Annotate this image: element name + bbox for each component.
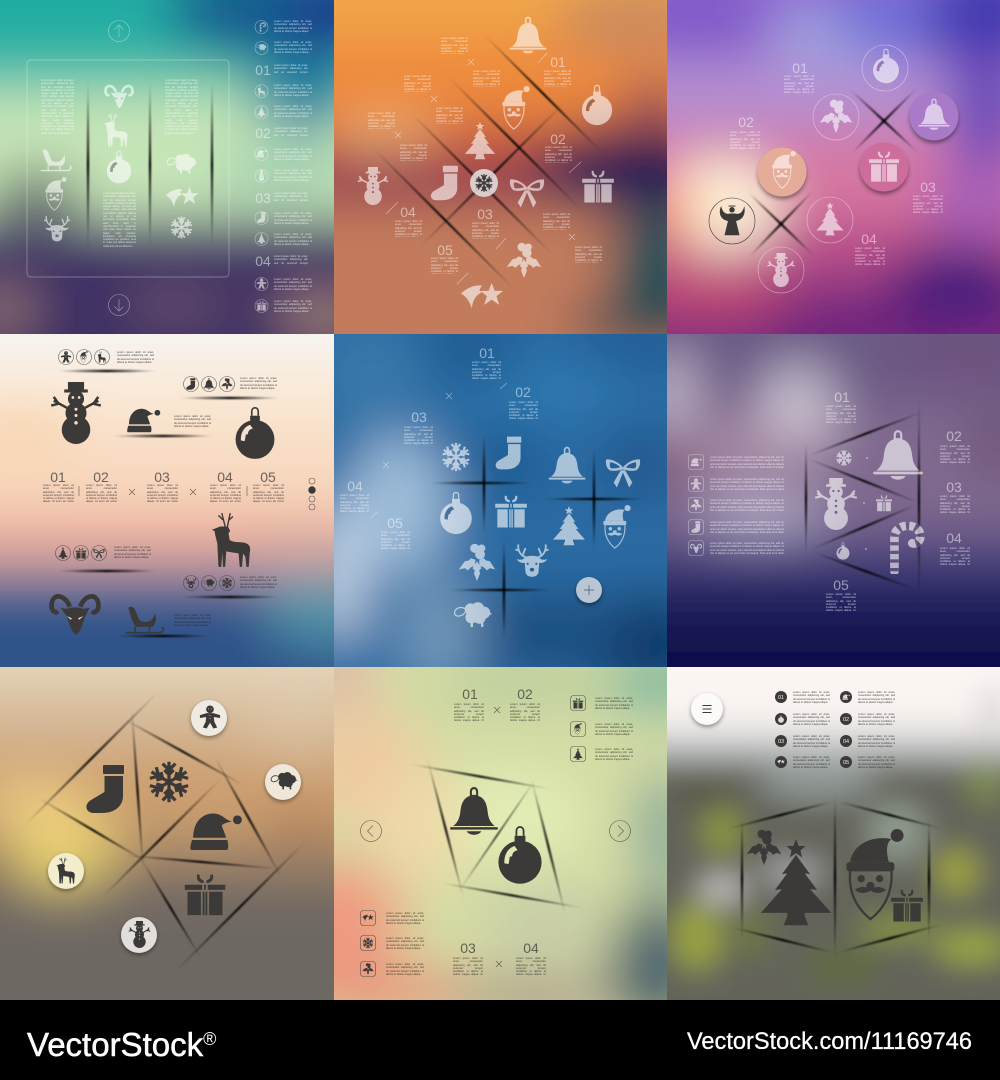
numbers: 02 bbox=[946, 428, 962, 444]
numbered list right: 02 bbox=[843, 717, 849, 723]
raised circle: bell bbox=[910, 92, 958, 143]
background blur bbox=[0, 547, 460, 1080]
numbers: 02 bbox=[255, 125, 271, 141]
icon: stocking bbox=[496, 437, 521, 469]
icon: tree with star bbox=[761, 839, 831, 925]
tick and cross marks bbox=[386, 53, 581, 284]
numbers: 05 bbox=[387, 515, 403, 531]
numbers bbox=[833, 389, 962, 593]
text: Lorem ipsum dolor sit amet, consectetur adipiscing elit, sed do eiusmod tempor incididunt ut labore et dolore magna aliqua. bbox=[793, 713, 830, 726]
dots bbox=[863, 457, 868, 550]
frame bbox=[27, 60, 229, 277]
triangle folds bbox=[409, 757, 585, 917]
text: Lorem ipsum dolor sit amet, consectetur adipiscing elit, sed do eiusmod tempor incididunt ut labore et dolore magna aliqua. bbox=[595, 697, 633, 710]
image id: VectorStock.com/11169746 bbox=[687, 1029, 972, 1055]
panel: dusk triangles bbox=[667, 334, 1000, 667]
icon: sheep bbox=[167, 154, 197, 174]
badge: deer bbox=[48, 853, 84, 891]
text: Lorem ipsum dolor sit amet, consectetur adipiscing elit, sed do eiusmod tempor incididunt ut labore et dolore magna aliqua. bbox=[274, 169, 312, 182]
numbers: 01 bbox=[834, 389, 850, 405]
text: Lorem ipsum dolor sit amet, consectetur adipiscing elit, sed do eiusmod tempor incididunt ut labore et dolore magna aliqua. bbox=[274, 300, 312, 313]
numbers: 03 bbox=[477, 206, 493, 222]
left icon tiles bbox=[360, 910, 376, 976]
text: Lorem ipsum dolor sit amet, consectetur adipiscing elit, sed do eiusmod tempor incididunt ut labore et dolore magna aliqua. bbox=[386, 912, 424, 925]
icon row 3 bbox=[56, 546, 106, 560]
numbers: 05 bbox=[260, 469, 276, 485]
text: Lorem ipsum dolor sit amet, consectetur adipiscing elit, sed do eiusmod tempor incididunt ut labore et dolore magna aliqua. bbox=[595, 723, 633, 736]
text: Lorem ipsum dolor sit amet, consectetur adipiscing elit, sed do eiusmod tempor incididunt ut labore et dolore magna aliqua. bbox=[793, 735, 830, 748]
footer brand bar bbox=[0, 1000, 1000, 1080]
icon: ram bbox=[52, 596, 98, 635]
panel: tan polygon bbox=[0, 667, 334, 1000]
text: Lorem ipsum dolor sit amet, consectetur adipiscing elit, sed do eiusmod tempor incididunt ut labore et dolore magna aliqua. bbox=[858, 756, 895, 769]
icon: sheep bbox=[455, 602, 492, 627]
text: Lorem ipsum dolor sit amet, consectetur adipiscing elit, sed do eiusmod tempor incididunt ut labore et dolore magna aliqua. bbox=[240, 576, 277, 589]
circle: snowman bbox=[758, 247, 804, 293]
background blur bbox=[214, 547, 794, 1080]
text: Lorem ipsum dolor sit amet, consectetur adipiscing elit, sed do eiusmod tempor incididunt ut labore et dolore magna aliqua. bbox=[274, 233, 312, 246]
icon: hat bbox=[127, 409, 160, 432]
numbers: 01 bbox=[479, 345, 495, 361]
numbers: 05 bbox=[833, 577, 849, 593]
icon: gift bbox=[185, 874, 225, 915]
background blur bbox=[547, 0, 1000, 460]
numbered list left: 01 bbox=[778, 695, 784, 701]
icon row 1 bbox=[58, 350, 110, 364]
text: Lorem ipsum dolor sit amet, consectetur adipiscing elit, sed do eiusmod tempor incididunt ut labore et dolore magna aliqua. bbox=[793, 691, 830, 704]
icon: ornament bbox=[498, 827, 542, 884]
icon: deer bbox=[104, 114, 127, 146]
icon: bell bbox=[873, 430, 923, 480]
numbers: 03 bbox=[154, 469, 170, 485]
text: Lorem ipsum dolor sit amet, consectetur adipiscing elit, sed do eiusmod tempor incididunt ut labore et dolore magna aliqua. bbox=[117, 351, 154, 364]
icon: comet bbox=[166, 187, 198, 207]
text: Lorem ipsum dolor sit amet, consectetur adipiscing elit, sed do eiusmod tempor incididunt ut labore et dolore magna aliqua. bbox=[274, 84, 312, 97]
panel: blue grid bbox=[334, 334, 667, 667]
text: Lorem ipsum dolor sit amet, consectetur adipiscing elit, sed do eiusmod tempor incididunt ut labore et dolore magna aliqua. bbox=[386, 937, 424, 950]
raised circle: santa bbox=[758, 148, 806, 199]
panel: forest blur with cube bbox=[667, 667, 1000, 1000]
icon: sleigh bbox=[41, 149, 71, 171]
diagonal folds bbox=[370, 32, 608, 293]
icon: snowman bbox=[815, 478, 857, 530]
icon: bell bbox=[450, 787, 498, 835]
numbers: 01 bbox=[550, 54, 566, 70]
text: Lorem ipsum dolor sit amet, consectetur adipiscing elit, sed do eiusmod tempor incididunt ut labore et dolore magna aliqua. bbox=[274, 20, 312, 33]
icon row 2 bbox=[184, 376, 234, 392]
background blur bbox=[0, 0, 460, 460]
numbers: 04 bbox=[255, 253, 271, 269]
numbers: 03 bbox=[920, 179, 936, 195]
icon: bow bbox=[606, 459, 640, 488]
plus button bbox=[576, 577, 602, 605]
icon: sleigh bbox=[126, 607, 163, 633]
icon: comet bbox=[461, 283, 503, 308]
icon: gift bbox=[891, 890, 923, 922]
text: Lorem ipsum dolor sit amet, consectetur adipiscing elit, sed do eiusmod tempor incididunt ut labore et dolore magna aliqua. bbox=[274, 41, 312, 54]
icon: snowman bbox=[51, 382, 101, 444]
text: Lorem ipsum dolor sit amet, consectetur adipiscing elit, sed do eiusmod tempor incididunt ut labore et dolore magna aliqua. bbox=[174, 614, 211, 627]
right icon tiles bbox=[570, 696, 586, 762]
icon: deer bbox=[212, 513, 250, 567]
text column 3: Lorem ipsum dolor sit amet, consectetur adipiscing elit, sed do eiusmod tempor incididunt ut labore et dolore magna aliqua. Ut enim ad minim veniam, quis nostrud exercitation ullamco laboris nisi ut aliquip ex ea commodo consequat. Duis aute irure dolor in reprehenderit in voluptate velit esse cillum dolore eu fugiat nulla pariatur. Excepteur sint occaecat cupidatat non proident, sunt in culpa qui officia deserunt mollit anim id est laborum. bbox=[165, 79, 198, 135]
numbers: 04 bbox=[946, 530, 962, 546]
icon: ram bbox=[105, 86, 133, 108]
background blur bbox=[214, 214, 794, 794]
icon: ornament bbox=[107, 151, 131, 183]
icon: tree bbox=[553, 506, 585, 545]
badge: sheep bbox=[265, 764, 301, 802]
numbers: 01 bbox=[255, 62, 271, 78]
arrow down button bbox=[108, 294, 130, 316]
numbers: 02 bbox=[517, 686, 533, 702]
icon: snowflake bbox=[148, 762, 190, 802]
icon: santa bbox=[45, 177, 67, 210]
text: Lorem ipsum dolor sit amet, consectetur adipiscing elit, sed do eiusmod tempor incididunt ut labore et dolore magna aliqua. bbox=[386, 963, 424, 976]
text column 2: Lorem ipsum dolor sit amet, consectetur adipiscing elit, sed do eiusmod tempor incididunt ut labore et dolore magna aliqua. Ut enim ad minim veniam, quis nostrud exercitation ullamco laboris nisi ut aliquip ex ea commodo consequat. Duis aute irure dolor in reprehenderit in voluptate velit esse cillum dolore eu fugiat nulla pariatur. Excepteur sint occaecat cupidatat non proident, sunt in culpa qui officia deserunt mollit anim id est laborum. bbox=[103, 192, 136, 248]
numbers: 04 bbox=[861, 231, 877, 247]
circle: tree bbox=[807, 197, 853, 243]
numbers: 04 bbox=[523, 940, 539, 956]
icon: gift bbox=[582, 171, 614, 203]
numbered list left: 03 bbox=[778, 739, 784, 745]
icon row 4 bbox=[184, 576, 234, 590]
icon: hat bbox=[190, 814, 242, 850]
numbers bbox=[400, 54, 566, 258]
arrow up button bbox=[108, 20, 130, 42]
numbers: 02 bbox=[738, 114, 754, 130]
text: Lorem ipsum dolor sit amet, consectetur adipiscing elit, sed do eiusmod tempor incididunt ut labore et dolore magna aliqua. bbox=[858, 735, 895, 748]
text column 1: Lorem ipsum dolor sit amet, consectetur adipiscing elit, sed do eiusmod tempor incididunt ut labore et dolore magna aliqua. Ut enim ad minim veniam, quis nostrud exercitation ullamco laboris nisi ut aliquip ex ea commodo consequat. Duis aute irure dolor in reprehenderit in voluptate velit esse cillum dolore eu fugiat nulla pariatur. Excepteur sint occaecat cupidatat non proident, sunt in culpa qui officia deserunt mollit anim id est laborum. bbox=[41, 79, 74, 135]
numbers: 04 bbox=[400, 204, 416, 220]
icon: stocking bbox=[431, 166, 458, 200]
numbers: 01 bbox=[792, 60, 808, 76]
icon: snowflake bbox=[442, 443, 470, 471]
icon: bell bbox=[549, 447, 585, 484]
text: Lorem ipsum dolor sit amet, consectetur adipiscing elit, sed do eiusmod tempor incididunt ut labore et dolore magna aliqua. bbox=[240, 377, 277, 390]
numbers bbox=[50, 469, 276, 485]
sidebar icon list bbox=[255, 20, 268, 312]
icon: santa bbox=[846, 829, 904, 919]
column folds bbox=[87, 80, 213, 250]
icon: ornament bbox=[236, 408, 274, 459]
background blur bbox=[214, 0, 794, 460]
icon: holly bbox=[747, 830, 781, 865]
polygon folds bbox=[22, 689, 308, 975]
text: Lorem ipsum dolor sit amet, consectetur adipiscing elit, sed do eiusmod tempor incididunt ut labore et dolore magna aliqua. bbox=[274, 148, 312, 161]
circle: ornament bbox=[862, 45, 908, 91]
circle: holly bbox=[813, 94, 859, 140]
icon: snowflake bbox=[170, 216, 193, 238]
text: Lorem ipsum dolor sit amet, consectetur adipiscing elit, sed do eiusmod tempor incididunt ut labore et dolore magna aliqua. bbox=[858, 713, 895, 726]
numbers bbox=[738, 60, 936, 247]
numbers bbox=[255, 62, 271, 269]
icon: bow bbox=[510, 179, 544, 208]
icon: holly bbox=[459, 544, 495, 581]
icon: candy cane bbox=[894, 526, 920, 571]
icon: snowflake bbox=[836, 450, 852, 466]
numbers: 04 bbox=[217, 469, 233, 485]
text: Lorem ipsum dolor sit amet, consectetur adipiscing elit, sed do eiusmod tempor incididunt ut labore et dolore magna aliqua. bbox=[274, 278, 312, 291]
arrow right bbox=[610, 820, 630, 842]
icon: ornament bbox=[837, 543, 849, 560]
center folds bbox=[746, 87, 919, 259]
panel: peach timeline bbox=[0, 334, 334, 667]
icon: reindeer bbox=[515, 544, 549, 577]
panel: pastel triangles bbox=[334, 667, 667, 1000]
text: Lorem ipsum dolor sit amet, consectetur adipiscing elit, sed do eiusmod tempor incididunt ut labore et dolore magna aliqua. bbox=[595, 748, 633, 761]
numbers: 02 bbox=[93, 469, 109, 485]
numbers: 01 bbox=[462, 686, 478, 702]
separators bbox=[79, 486, 247, 496]
numbered list right bbox=[840, 691, 852, 768]
numbers: 01 bbox=[50, 469, 66, 485]
numbers: 03 bbox=[411, 409, 427, 425]
icon: tree bbox=[465, 122, 495, 159]
numbers bbox=[347, 345, 531, 531]
icon: snowman bbox=[358, 167, 388, 205]
badge: snowman bbox=[121, 917, 157, 955]
text: Lorem ipsum dolor sit amet, consectetur adipiscing elit, sed do eiusmod tempor incididunt ut labore et dolore magna aliqua. bbox=[793, 756, 830, 769]
text: Lorem ipsum dolor sit amet, consectetur adipiscing elit, sed do eiusmod tempor incididunt ut labore et dolore magna aliqua. bbox=[174, 415, 211, 428]
numbered list right: 04 bbox=[843, 739, 849, 745]
raised circle: gift bbox=[860, 142, 908, 194]
numbered list right: 05 bbox=[843, 760, 849, 766]
text: Lorem ipsum dolor sit amet, consectetur adipiscing elit, sed do eiusmod tempor incididunt ut labore et dolore magna aliqua. bbox=[858, 691, 895, 704]
text: Lorem ipsum dolor sit amet, consectetur adipiscing elit, sed do eiusmod tempor incididunt ut labore et dolore magna aliqua. bbox=[114, 546, 151, 559]
numbers: 03 bbox=[460, 940, 476, 956]
panel: orange diagonal folds bbox=[334, 0, 667, 334]
cube folds bbox=[726, 792, 944, 962]
brand name: VectorStock® bbox=[27, 1026, 216, 1063]
icon: ornament bbox=[440, 492, 472, 534]
icon: holly bbox=[507, 243, 541, 278]
background blur bbox=[0, 214, 460, 794]
circle: angel bbox=[709, 198, 755, 244]
menu button bbox=[691, 693, 723, 727]
ticks and crosses bbox=[371, 383, 507, 518]
badge: gingerbread bbox=[191, 700, 227, 738]
crosses bbox=[494, 707, 502, 967]
left icon tiles bbox=[688, 454, 704, 556]
numbers: 03 bbox=[255, 190, 271, 206]
numbers: 02 bbox=[515, 384, 531, 400]
shadow folds bbox=[57, 370, 280, 637]
arrow left bbox=[360, 820, 382, 842]
icon: gift bbox=[495, 496, 527, 528]
numbers: 05 bbox=[437, 242, 453, 258]
icon: ornament bbox=[582, 85, 612, 125]
background blur bbox=[547, 214, 1000, 794]
pager dots bbox=[308, 478, 316, 510]
icon: santa bbox=[502, 86, 530, 129]
panel: teal blur with framed columns bbox=[0, 0, 334, 334]
grid folds bbox=[429, 432, 646, 642]
icon: bell bbox=[510, 17, 546, 54]
text: Lorem ipsum dolor sit amet, consectetur adipiscing elit, sed do eiusmod tempor incididunt ut labore et dolore magna aliqua. bbox=[274, 212, 312, 225]
icon: santa bbox=[603, 505, 631, 548]
icon: gift bbox=[876, 495, 892, 511]
numbers: 04 bbox=[347, 478, 363, 494]
background blur bbox=[547, 547, 1000, 1080]
numbers bbox=[460, 686, 539, 956]
icon: reindeer bbox=[44, 216, 70, 241]
numbered list left bbox=[775, 691, 787, 768]
icon: snowflake badge bbox=[470, 169, 498, 197]
text: Lorem ipsum dolor sit amet, consectetur adipiscing elit, sed do eiusmod tempor incididunt ut labore et dolore magna aliqua. bbox=[274, 105, 312, 118]
icon: stocking bbox=[86, 765, 124, 813]
triangle folds bbox=[805, 396, 924, 604]
numbers: 02 bbox=[550, 131, 566, 147]
panel: violet circles bbox=[667, 0, 1000, 334]
numbers: 03 bbox=[946, 479, 962, 495]
